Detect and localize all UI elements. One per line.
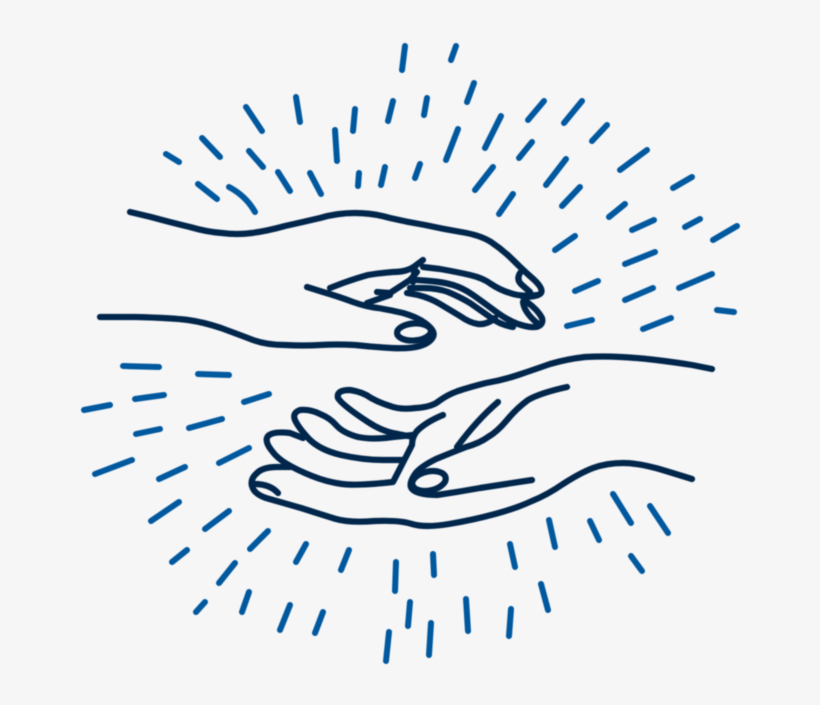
lower hand second finger (267, 415, 443, 485)
upper hand thumb and wrist (100, 287, 434, 348)
back of upper hand outline (130, 212, 542, 297)
lower thumb nail (410, 468, 448, 494)
upper hand (100, 212, 542, 348)
lower palm crease (457, 402, 498, 447)
lower hand third finger (294, 410, 413, 460)
lower hand thumb (411, 387, 567, 495)
upper hand index edge (330, 260, 423, 303)
upper thumb nail (396, 322, 432, 342)
lower hand palm edge (252, 463, 692, 526)
upper hand fingers (407, 267, 542, 327)
lower hand (252, 356, 712, 526)
rays: radiating blue dashes (84, 46, 737, 661)
lower hand top outline and first finger (338, 356, 712, 437)
lower pinky nail (254, 484, 278, 493)
